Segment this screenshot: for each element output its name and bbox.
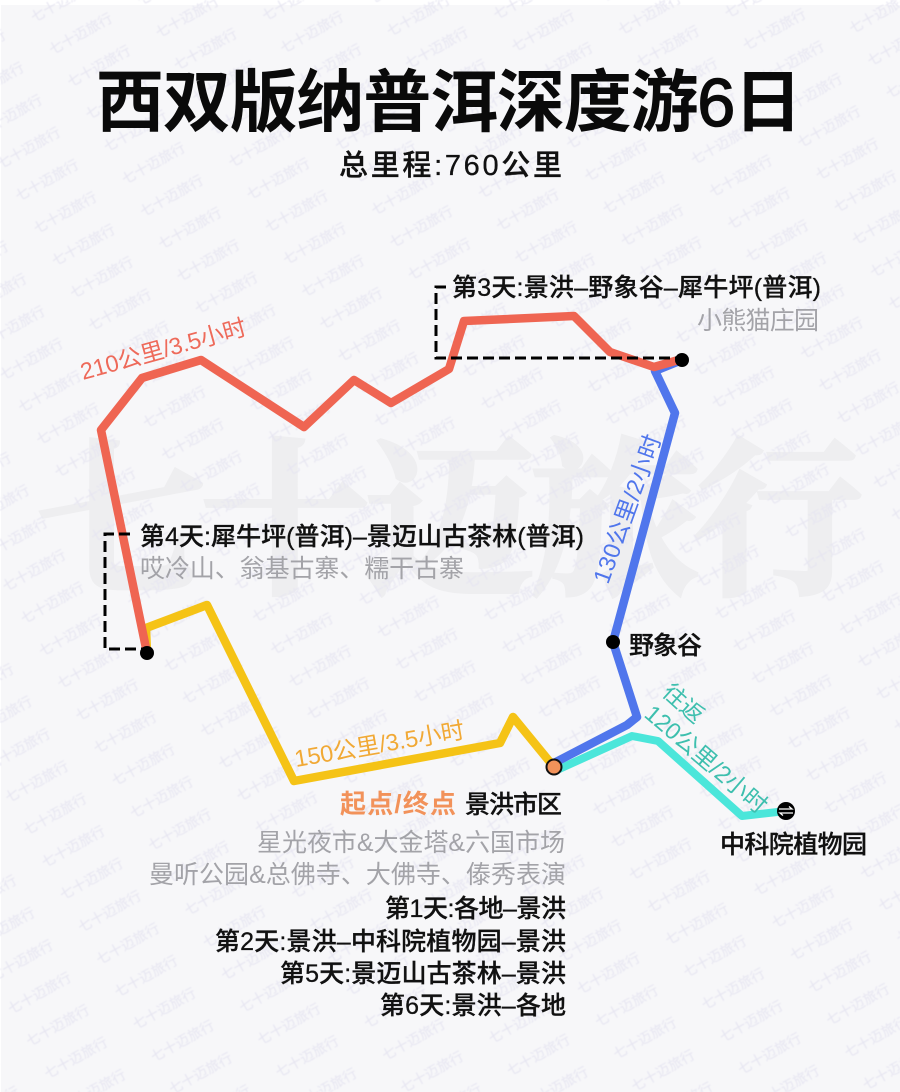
- text block: day 4: 第4天:犀牛坪(普洱)–景迈山古茶林(普洱): [140, 523, 584, 551]
- subtitle: total distance: 总里程:760公里: [339, 149, 562, 182]
- text block: day 3: 第3天:景洪–野象谷–犀牛坪(普洱): [452, 274, 821, 302]
- label: teal leg distance: 120公里/2小时: [640, 700, 772, 819]
- text block: start and end point: 第2天:景洪–中科院植物园–景洪: [215, 928, 566, 956]
- text block: day 4: 哎冷山、翁基古寨、糯干古寨: [140, 555, 464, 583]
- label: yellow leg distance: 150公里/3.5小时: [292, 717, 466, 772]
- text block: start and end point: 第1天:各地–景洪: [385, 895, 566, 923]
- text block: day 4: [140, 523, 584, 583]
- label: blue leg distance: 130公里/2小时: [588, 431, 666, 587]
- title: 西双版纳普洱深度游6日: [96, 65, 802, 141]
- label: teal round trip: 往返: [658, 678, 709, 728]
- label: Yexianggu: 野象谷: [629, 632, 702, 660]
- route map: [101, 316, 786, 816]
- route: blue day 3: [554, 360, 682, 763]
- text block: day 3: [452, 274, 821, 335]
- text: 七十迈旅行: [36, 385, 864, 630]
- icon: round trip marker: [777, 802, 795, 820]
- text block: start and end point: [149, 789, 566, 1020]
- text block: start and end point: 第6天:景洪–各地: [380, 992, 566, 1020]
- text block: start and end point: 第5天:景迈山古茶林–景洪: [280, 960, 566, 988]
- marker: start and end point: [546, 760, 562, 774]
- marker: Yexianggu: [606, 635, 620, 649]
- text block: start and end point: 曼听公园&总佛寺、大佛寺、傣秀表演: [149, 861, 566, 889]
- label: botanical garden: 中科院植物园: [720, 831, 867, 859]
- text block: start and end point: 景洪市区: [465, 791, 562, 819]
- connector: day 3 dashed leader: [436, 287, 682, 358]
- marker: day 4 stop: [140, 646, 154, 660]
- label: red leg distance: 210公里/3.5小时: [77, 314, 249, 385]
- text block: day 3: 小熊猫庄园: [697, 307, 819, 335]
- marker: day 3 stop: [675, 353, 689, 367]
- route: teal round trip to botanical garden: [557, 736, 786, 816]
- route: yellow day 5: [146, 605, 554, 781]
- route: red day 4: [101, 316, 682, 653]
- text block: start and end point: 起点/终点: [340, 789, 456, 819]
- text block: start and end point: 星光夜市&大金塔&六国市场: [257, 829, 565, 857]
- connector: day 4 dashed leader: [105, 534, 147, 649]
